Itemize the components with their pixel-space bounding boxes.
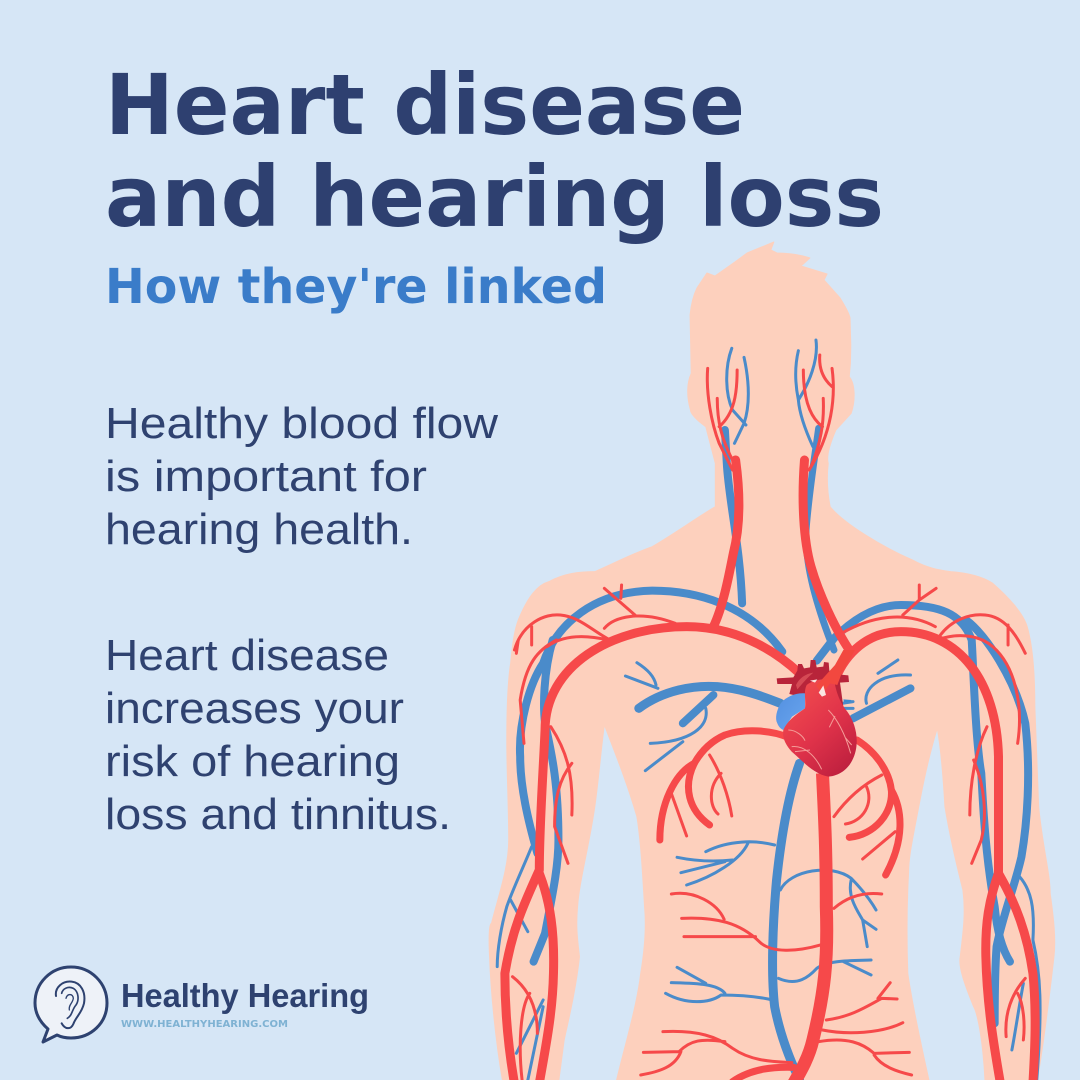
text block: blood flow: is important for (105, 452, 427, 501)
text block: blood flow (105, 399, 498, 554)
text block: heart disease risk: increases your (105, 684, 404, 733)
text block: heart disease risk: Heart disease (105, 631, 389, 680)
title (105, 56, 884, 246)
logo: Healthy Hearing: WWW.HEALTHYHEARING.COM (121, 1019, 288, 1030)
logo: Healthy Hearing (35, 967, 369, 1042)
illustration: human body with circulatory system (489, 242, 1055, 1080)
arteries (505, 355, 1035, 1080)
text block: heart disease risk: loss and tinnitus. (105, 790, 451, 839)
icon: ear in speech bubble (35, 967, 107, 1042)
text block: heart disease risk (105, 631, 451, 839)
logo: Healthy Hearing: Healthy Hearing (121, 977, 369, 1014)
text block: blood flow: Healthy blood flow (105, 399, 498, 448)
veins (497, 340, 1040, 1080)
title: and hearing loss (105, 148, 884, 246)
icon: heart (776, 650, 857, 777)
body silhouette (489, 242, 1055, 1080)
text block: heart disease risk: risk of hearing (105, 737, 400, 786)
title: Heart disease (105, 56, 745, 154)
subtitle: How they're linked (105, 259, 607, 315)
text block: blood flow: hearing health. (105, 505, 413, 554)
